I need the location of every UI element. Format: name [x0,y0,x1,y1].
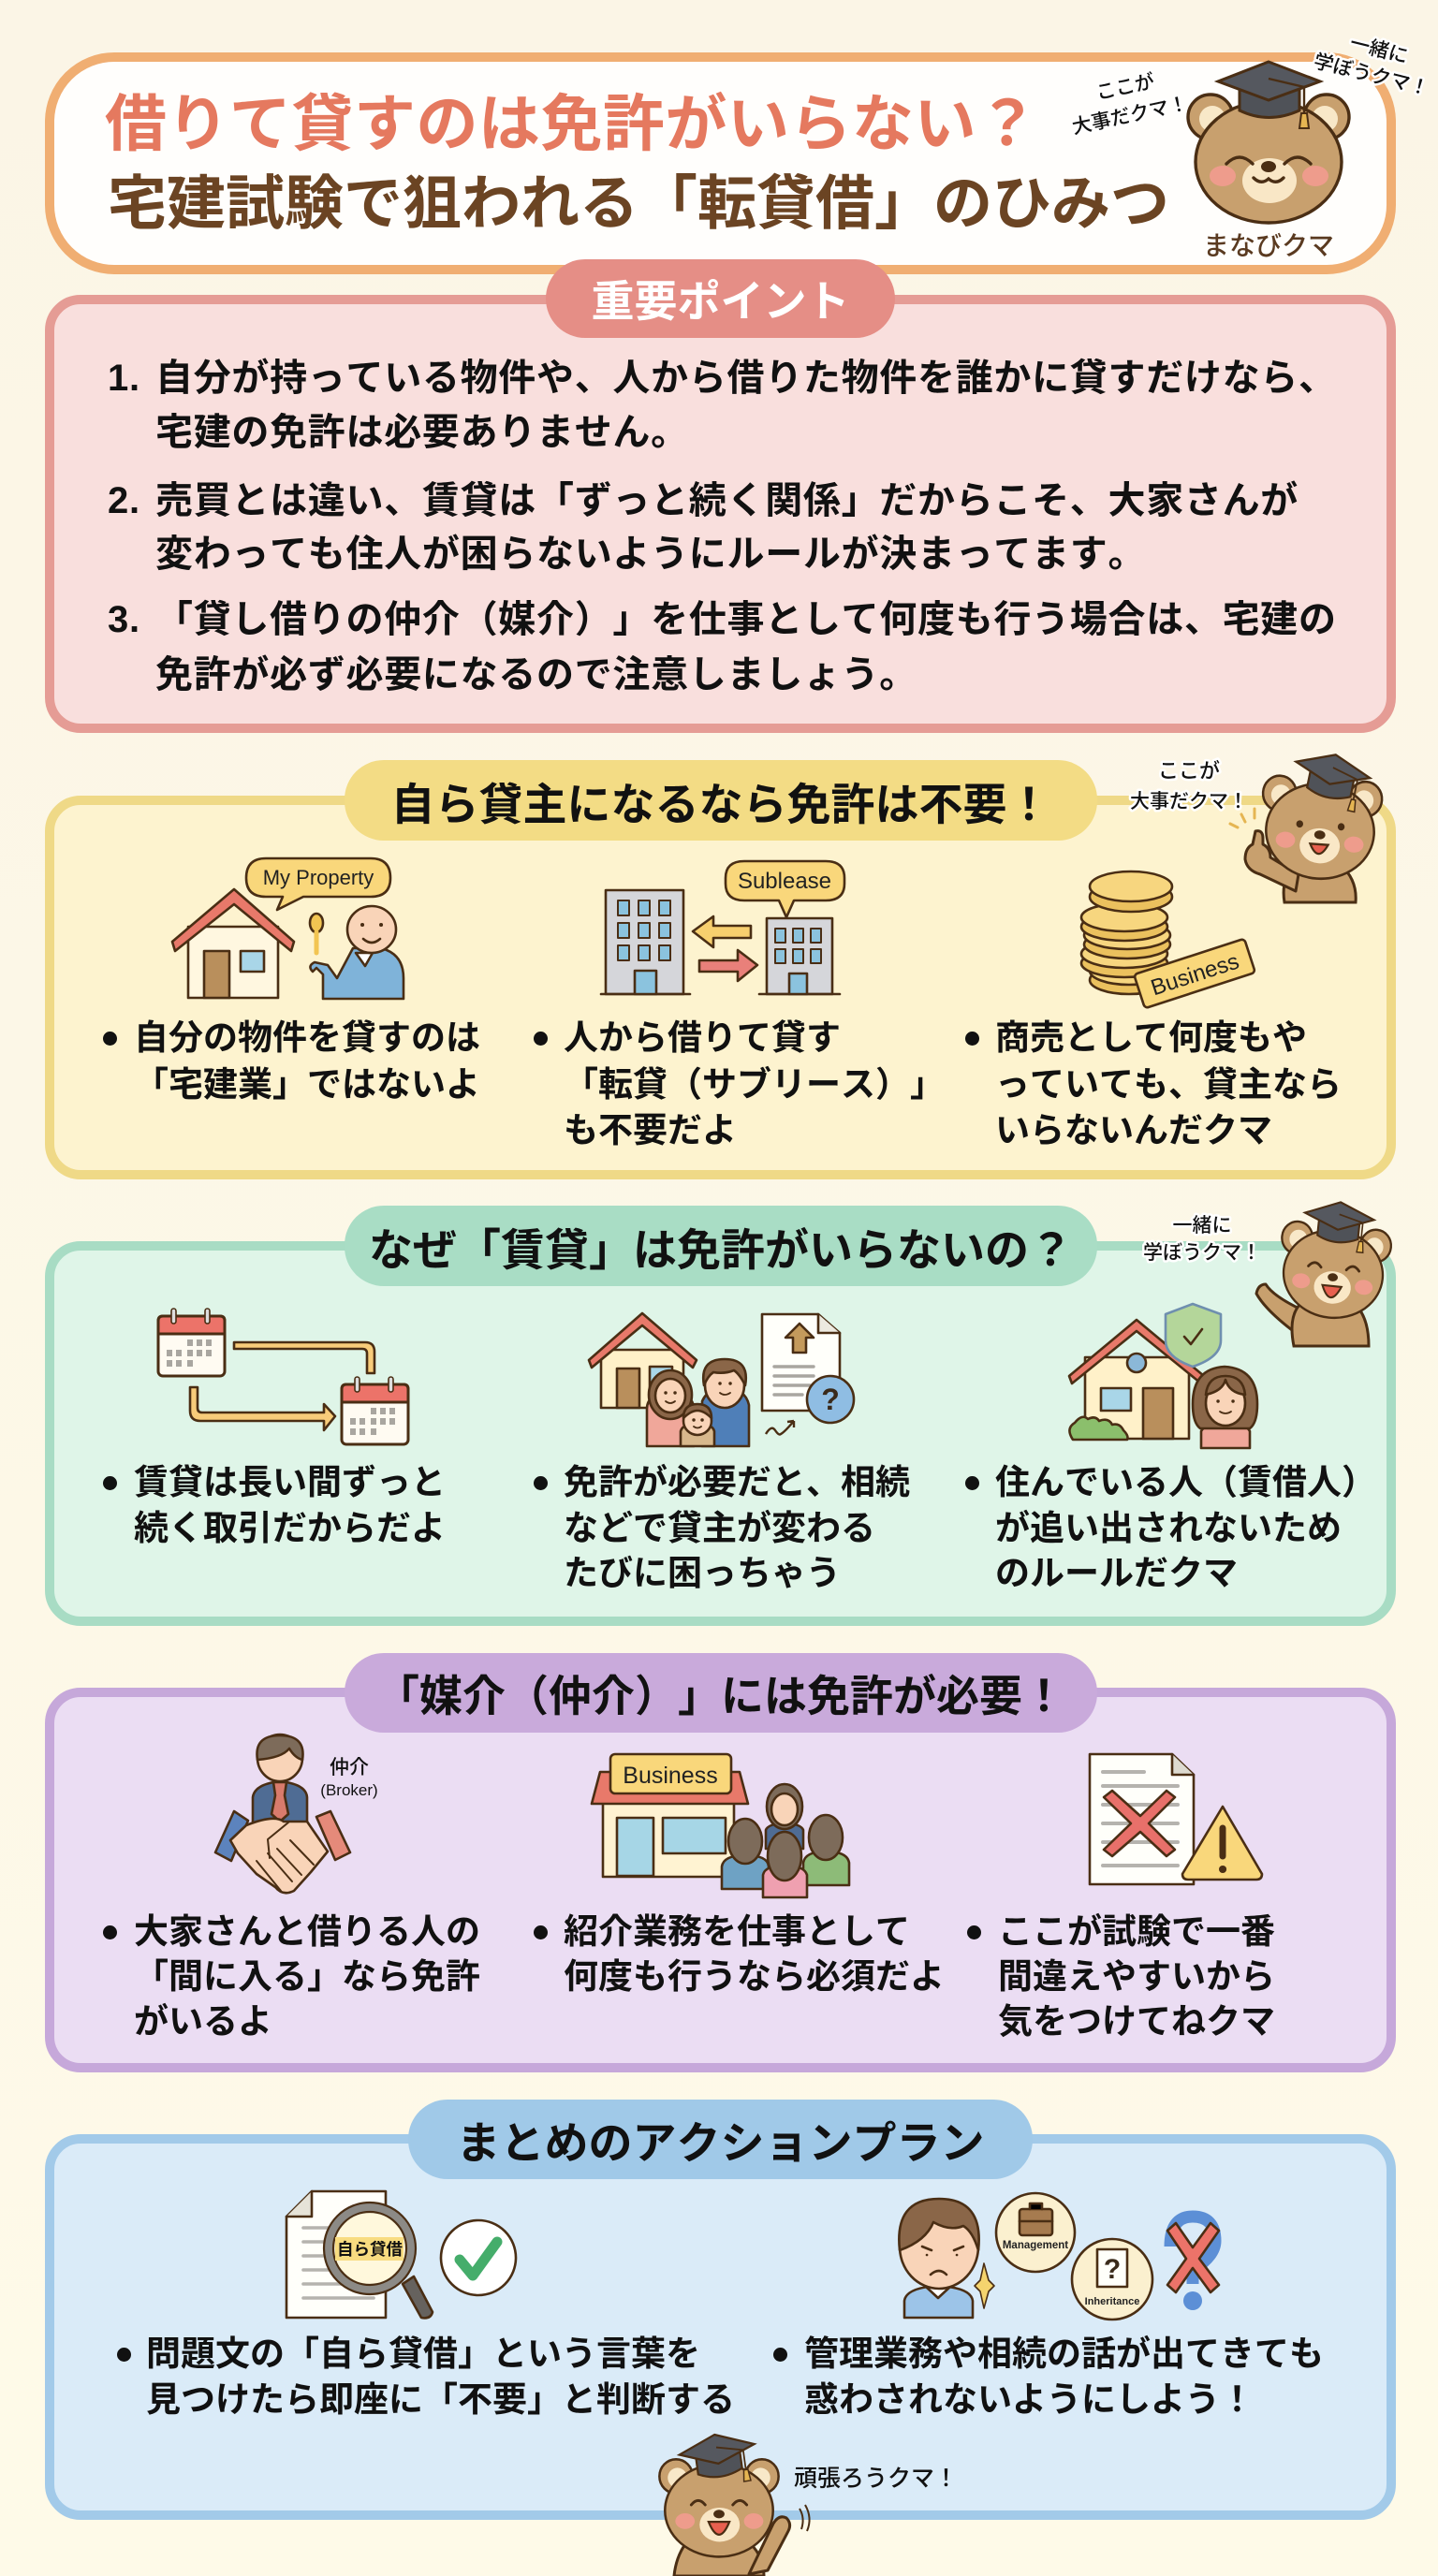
icon: storefront and customers: Business [623,1763,718,1789]
bear cheering at bottom [651,2429,969,2576]
text column 3: 商売として何度もや [995,1018,1307,1057]
text column 2: 免許が必要だと、相続 [564,1463,910,1501]
text column 2: 惑わされないようにしよう！ [804,2380,1255,2419]
panel: key points: 自分が持っている物件や、人から借りた物件を誰かに貸すだけなら、 [155,358,1337,399]
brokerage frame [45,1688,1396,2072]
bear waving: 学ぼうクマ！ [1143,1242,1261,1264]
mascot: graduate bear head: まなびクマ [1203,231,1334,260]
text column 1: 続く取引だからだよ [134,1509,446,1547]
panel: key points: 宅建の免許は必要ありません。 [155,412,689,453]
key points heading [546,259,895,338]
text column 1: 自分の物件を貸すのは [134,1018,480,1057]
text column 1 [103,1460,477,1552]
text column 2 [534,1910,946,1998]
mascot: graduate bear head [1058,37,1438,271]
mascot: graduate bear head: 学ぼうクマ！ [1312,51,1431,100]
key points heading: 重要ポイント [592,277,850,326]
why heading [345,1206,1097,1286]
text column 2: 何度も行うなら必須だよ [564,1957,945,1996]
icon: coins with business sign [1077,866,1259,1006]
text column 3 [965,1460,1358,1597]
icon: protected house and tenant [1065,1301,1262,1449]
bear with thumbs up [1152,754,1386,903]
text column 1: 問題文の「自ら貸借」という言葉を [146,2334,700,2373]
text column 2 [534,1016,946,1154]
title frame [45,52,1396,274]
mascot: graduate bear head: ここが [1094,71,1156,104]
brokerage heading: 「媒介（仲介）」には免許が必要！ [376,1672,1065,1720]
icon: family and document: ? [821,1383,840,1416]
text column 3: のルールだクマ [995,1554,1238,1592]
mascot: graduate bear head: 大事だクマ！ [1070,93,1190,139]
panel: key points [45,259,1396,733]
why heading: なぜ「賃貸」は免許がいらないの？ [369,1224,1073,1275]
text column 1: 「宅建業」ではないよ [134,1065,480,1104]
text column 1 [103,1910,477,2043]
title line 2: 宅建試験で狙われる「転貸借」のひみつ [108,171,1169,237]
text column 3: ここが試験で一番 [998,1912,1275,1951]
text column 1: 「間に入る」なら免許 [134,1957,480,1996]
icon: sublease buildings: Sublease [738,869,831,894]
title line 1: 借りて貸すのは免許がいらない？ [105,89,1039,158]
text column 3 [965,1016,1340,1154]
panel: key points: 売買とは違い、賃貸は「ずっと続く関係」だからこそ、大家さんが [155,480,1299,521]
panel: action plan [45,2100,1396,2520]
bear with thumbs up: ここが [1158,759,1220,783]
icon: broker and handshake [213,1734,391,1895]
text column 2: 紹介業務を仕事として [564,1912,910,1951]
icon: puzzled student and distractors: Management [1003,2240,1068,2251]
bear cheering at bottom: 頑張ろうクマ！ [794,2466,958,2492]
panel: key points: 「貸し借りの仲介（媒介）」を仕事として何度も行う場合は、宅建の [155,599,1337,640]
text column 2 [773,2332,1335,2422]
point 1: 1. [108,358,140,399]
text column 3: っていても、貸主なら [995,1065,1342,1104]
text column 3 [967,1910,1285,2043]
action plan heading [408,2100,1033,2179]
panel: key points: 免許が必ず必要になるので注意しましょう。 [155,654,917,695]
title panel [45,37,1438,275]
point 2: 2. [108,480,140,521]
icon: house, key and owner: My Property [263,866,374,889]
text column 1: がいるよ [134,2002,272,2041]
text column 2: 管理業務や相続の話が出てきても [804,2334,1324,2373]
icon: sublease buildings [599,859,847,998]
self-lessor heading: 自ら貸主になるなら免許は不要！ [391,779,1050,829]
icon: puzzled student and distractors [894,2190,1226,2321]
icon: coins with business sign: Business [1148,949,1242,1001]
text column 1 [103,1016,477,1109]
text column 3: 気をつけてねクマ [998,2002,1275,2041]
text column 1: 賃貸は長い間ずっと [134,1463,446,1501]
text column 3: 間違えやすいから [998,1957,1275,1996]
text column 2: たびに困っちゃう [564,1554,841,1592]
self-lessor frame [45,796,1396,1179]
point 3: 3. [108,599,140,640]
icon: magnifier over document and check [285,2190,519,2320]
icon: family and document [585,1310,857,1447]
why frame [45,1241,1396,1626]
text column 1: 見つけたら即座に「不要」と判断する [146,2380,735,2419]
bear waving: 一緒に [1172,1215,1232,1237]
text column 2 [534,1460,946,1597]
icon: puzzled student and distractors: Inheritance [1085,2296,1139,2307]
panel: key points: 変わっても住人が困らないようにルールが決まってます。 [155,534,1146,575]
icon: calendars and arrows [154,1306,412,1446]
text column 2: 人から借りて貸す [564,1018,841,1057]
icon: document with cross and warning [1086,1752,1266,1885]
text column 3: 住んでいる人（賃借人） [995,1463,1376,1501]
text column 2: も不要だよ [564,1111,737,1149]
brokerage heading [345,1653,1097,1733]
panel: brokerage needs a license [45,1653,1396,2072]
icon: broker and handshake: (Broker) [320,1781,378,1799]
bear waving [1152,1196,1397,1346]
action plan frame [45,2134,1396,2520]
icon: magnifier over document and check: 自ら貸借 [337,2240,403,2259]
icon: house, key and owner [169,854,412,1003]
text column 2: などで貸主が変わる [564,1509,875,1547]
panel: why rentals need no license [45,1196,1396,1626]
icon: storefront and customers [590,1752,854,1900]
text column 1: 大家さんと借りる人の [134,1912,480,1951]
text column 1 [117,2332,716,2422]
text column 3: いらないんだクマ [995,1111,1272,1149]
self-lessor heading [345,760,1097,841]
icon: broker and handshake: 仲介 [330,1757,369,1778]
key points frame [45,295,1396,733]
action plan heading: まとめのアクションプラン [457,2118,985,2168]
panel: self-lessor [45,754,1396,1179]
bear with thumbs up: 大事だクマ！ [1130,791,1248,812]
text column 2: 「転貸（サブリース）」 [564,1065,945,1104]
icon: puzzled student and distractors: ? [1104,2254,1121,2285]
text column 3: が追い出されないため [995,1509,1342,1547]
mascot: graduate bear head: 一緒に [1348,33,1410,67]
